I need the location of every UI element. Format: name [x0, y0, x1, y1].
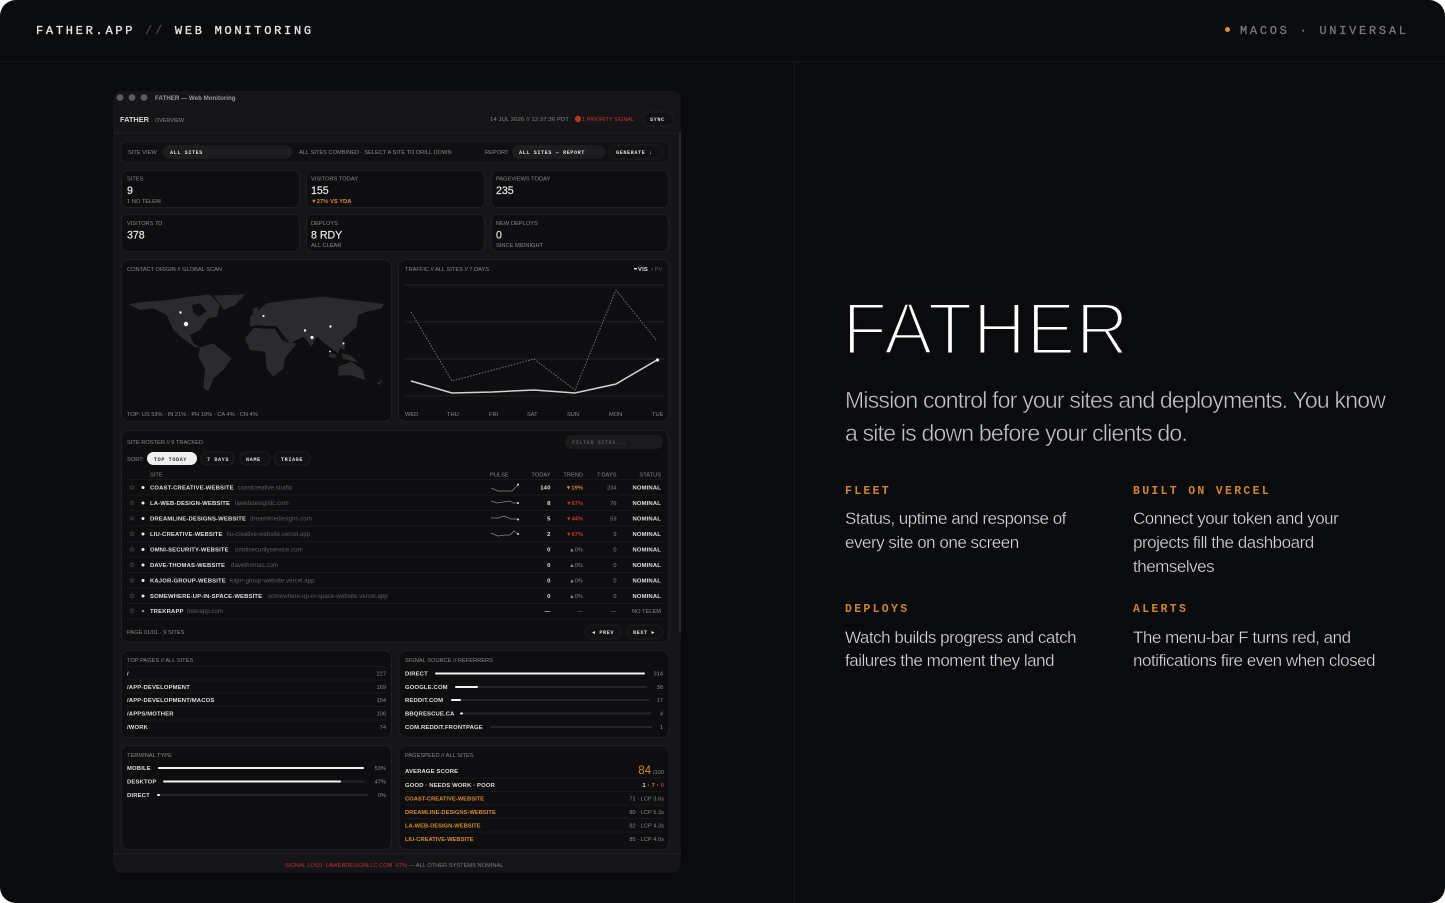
deploys text: Watch builds progress and catch: [845, 628, 1076, 646]
row: coast creative: [129, 484, 661, 492]
row: kajor group: [129, 576, 661, 584]
row: kajor group: 0: [547, 578, 551, 584]
row: la web design: ☆: [129, 499, 135, 507]
table row lines: [127, 480, 664, 619]
table header: TODAY: [531, 472, 551, 478]
stat card: pageviews today: PAGEVIEWS TODAY: [496, 176, 550, 182]
deploys text: [845, 628, 1076, 670]
fleet heading: FLEET: [845, 484, 891, 498]
row: somewhere up in space: ▲0%: [569, 594, 583, 600]
stat card: deploys: [306, 214, 484, 252]
panel: pagespeed: 84: [638, 765, 652, 777]
pagination: ◄ PREV: [592, 630, 614, 636]
header bar: [0, 0, 1445, 62]
row: trekrapp: ☆: [129, 607, 135, 615]
panel: contact origin world map: TOP: US 53% · IN 21% · PH 10% · CA 4% · CN 4%: [127, 412, 258, 418]
top toolbar: FATHER: [120, 115, 150, 124]
row: omni security: 0: [613, 548, 616, 554]
stat card: new deploys: [492, 214, 668, 252]
panel: terminal type bars: [122, 746, 392, 850]
stat card: pageviews today: 235: [496, 185, 514, 197]
site view selector bar: SITE VIEW: [128, 150, 157, 156]
panel: traffic line chart: ▪ PV: [651, 267, 662, 273]
row: kajor group: kajor-group-website.vercel.app: [230, 578, 315, 584]
day labels: SAT: [527, 412, 538, 418]
row: omni security: [129, 546, 661, 554]
stat card: visitors 7d: 378: [127, 230, 145, 242]
panel: terminal type bars: 53%: [375, 766, 386, 772]
top toolbar: SYNC: [650, 117, 665, 123]
row: liu creative: 2: [547, 532, 551, 538]
row: trekrapp: [129, 607, 661, 615]
site view selector bar: [121, 141, 669, 163]
stat card: visitors 7d: [122, 214, 300, 252]
row: omni security: ☆: [129, 546, 135, 554]
row: la web design: lawebdesignllc.com: [235, 500, 289, 507]
table header: STATUS: [639, 472, 661, 478]
stat card: visitors today: [306, 170, 484, 208]
panel: terminal type bars: TERMINAL TYPE: [127, 753, 172, 759]
sort controls: NAME: [246, 457, 261, 463]
panel: pagespeed: LIU-CREATIVE-WEBSITE: [405, 837, 474, 843]
panel: top pages: 106: [376, 712, 386, 718]
description: Mission control for your sites and deployments. You know: [845, 387, 1385, 413]
footer signal ticker: SIGNAL LOSS: LAWEBDESIGNLLC.COM -67% — ALL OTHER SYSTEMS NOMINAL: [285, 863, 503, 869]
panel: top pages: /APPS/MOTHER: [127, 712, 174, 718]
panel: contact origin world map: CONTACT ORIGIN // GLOBAL SCAN: [127, 267, 222, 273]
table header: TREND: [563, 472, 583, 478]
row: omni security: ▲0%: [569, 548, 583, 554]
row: omni security: OMNI-SECURITY-WEBSITE: [150, 548, 229, 554]
row: coast creative: 140: [540, 486, 551, 492]
row: trekrapp: NO TELEM: [632, 609, 661, 615]
row: la web design: NOMINAL: [632, 501, 661, 507]
row: liu creative: liu-creative-website.vercel.app: [227, 531, 311, 538]
feature: alerts: [1133, 603, 1375, 670]
alerts heading: ALERTS: [1133, 603, 1188, 616]
row: dreamline designs: 59: [610, 516, 616, 522]
panel: top pages: /WORK: [127, 725, 149, 731]
panel: signal source referrers: SIGNAL SOURCE // REFERRERS: [405, 658, 493, 664]
filter input: [565, 435, 663, 449]
row: la web design: ▼67%: [566, 501, 583, 507]
panel: terminal type bars: DIRECT: [127, 793, 150, 799]
panel: top pages: TOP PAGES // ALL SITES: [127, 658, 193, 664]
stat card: new deploys: SINCE MIDNIGHT: [496, 243, 544, 249]
feature: fleet: [845, 484, 1066, 552]
app screenshot: web monitoring dashboard: [113, 91, 681, 873]
row: liu creative: [129, 530, 661, 538]
row: coast creative: NOMINAL: [632, 486, 661, 492]
panel: pagespeed: 85 · LCP 4.0s: [629, 837, 664, 843]
pageviews dashed line: [411, 290, 657, 390]
panel: pagespeed: [399, 746, 669, 850]
vercel text: themselves: [1133, 557, 1214, 576]
row: la web design: [129, 499, 661, 507]
window frame: [113, 91, 681, 873]
row: somewhere up in space: 0: [547, 594, 551, 600]
title bar: [117, 94, 236, 102]
vertical divider: [794, 62, 795, 903]
row: kajor group: KAJOR-GROUP-WEBSITE: [150, 578, 226, 584]
day labels: [405, 412, 664, 418]
fleet text: [845, 509, 1066, 552]
pagination: [127, 625, 663, 639]
row: trekrapp: TREKRAPP: [150, 609, 184, 615]
panel: pagespeed: PAGESPEED // ALL SITES: [405, 753, 474, 759]
day labels: TUE: [652, 412, 664, 418]
pagination: PAGE 01/01 · 9 SITES: [127, 630, 185, 636]
fleet text: Status, uptime and response of: [845, 509, 1066, 528]
row: somewhere up in space: SOMEWHERE-UP-IN-SPACE-WEBSITE: [150, 594, 262, 600]
stat card: visitors 7d: VISITORS 7D: [127, 221, 162, 227]
table header: [150, 472, 661, 478]
fleet text: every site on one screen: [845, 533, 1019, 552]
site view selector bar: REPORT: [485, 150, 509, 156]
panel: pagespeed: 1 · 7 · 0: [642, 783, 665, 789]
top toolbar: 14 JUL 2026 // 12:37:36 PDT: [490, 117, 569, 123]
panel: pagespeed: AVERAGE SCORE: [405, 769, 458, 775]
panel: signal source referrers: COM.REDDIT.FRONTPAGE: [405, 725, 483, 731]
row: liu creative: NOMINAL: [632, 532, 661, 538]
stat card: deploys: DEPLOYS: [311, 221, 338, 227]
panel: pagespeed: /100: [653, 770, 664, 776]
sort controls: [127, 452, 310, 465]
panel: traffic line chart: TRAFFIC // ALL SITES // 7 DAYS: [405, 267, 489, 273]
stat card: pageviews today: [492, 170, 668, 208]
panel: top pages: /: [127, 672, 129, 678]
row: dave thomas: [129, 561, 661, 569]
table header: PULSE: [490, 472, 509, 478]
panel: terminal type bars: MOBILE: [127, 766, 151, 772]
stat card: visitors today: 155: [311, 185, 329, 197]
panel: top pages: 74: [380, 725, 386, 731]
row: dave thomas: ☆: [129, 561, 135, 569]
vercel heading: BUILT ON VERCEL: [1133, 484, 1271, 498]
row: la web design: LA-WEB-DESIGN-WEBSITE: [150, 501, 230, 507]
row: liu creative: ☆: [129, 530, 135, 538]
panel: site roster table: SITE ROSTER // 9 TRACKED: [127, 440, 203, 446]
row: dave thomas: DAVE-THOMAS-WEBSITE: [150, 563, 225, 569]
day labels: SUN: [567, 412, 579, 418]
panel: site roster table: [122, 430, 668, 642]
sort controls: TRIAGE: [281, 457, 303, 463]
row: liu creative: LIU-CREATIVE-WEBSITE: [150, 532, 223, 538]
row: somewhere up in space: ☆: [129, 592, 135, 600]
row: dave thomas: 0: [547, 563, 551, 569]
panel: top pages: /APP-DEVELOPMENT: [127, 685, 190, 691]
row: dreamline designs: DREAMLINE-DESIGNS-WEBSITE: [150, 516, 246, 522]
row: la web design: 76: [610, 501, 616, 507]
row: omni security: omnisecurityservice.com: [235, 546, 303, 554]
sort controls: 7 DAYS: [207, 457, 229, 463]
row: trekrapp: —: [611, 609, 617, 615]
description: [845, 387, 1386, 446]
row: la web design: 8: [547, 501, 551, 507]
day labels: FRI: [489, 412, 499, 418]
row: dreamline designs: NOMINAL: [632, 516, 661, 522]
stat card: sites: 1 NO TELEM: [127, 199, 161, 205]
alerts text: notifications fire even when closed: [1133, 651, 1375, 670]
panel: terminal type bars: 47%: [375, 780, 386, 786]
row: liu creative: 9: [613, 532, 616, 538]
stat card: sites: SITES: [127, 176, 144, 182]
day labels: WED: [405, 412, 418, 418]
deploys heading: DEPLOYS: [845, 603, 909, 616]
row: kajor group: NOMINAL: [632, 578, 661, 584]
row: somewhere up in space: NOMINAL: [632, 594, 661, 600]
site view selector bar: ALL SITES: [170, 150, 203, 156]
vercel text: Connect your token and your: [1133, 509, 1338, 528]
deploys text: failures the moment they land: [845, 651, 1054, 670]
alerts text: [1133, 628, 1375, 670]
day labels: THU: [447, 412, 459, 418]
row: coast creative: coastcreative.studio: [238, 484, 293, 492]
stat card: sites: 9: [127, 185, 133, 197]
stat card: new deploys: NEW DEPLOYS: [496, 221, 538, 227]
panel: top pages: /APP-DEVELOPMENT/MACOS: [127, 698, 214, 704]
top toolbar: [113, 112, 681, 633]
panel: signal source referrers: DIRECT: [405, 672, 428, 678]
row: somewhere up in space: somewhere-up-in-space-website.vercel.app: [268, 593, 388, 600]
site view selector bar: GENERATE ↓: [616, 150, 653, 156]
pagination: NEXT ►: [633, 630, 655, 636]
row: dave thomas: davethomas.com: [231, 562, 278, 569]
panel: pagespeed: 80 · LCP 5.3s: [629, 810, 664, 816]
row: dreamline designs: dreamlinedesigns.com: [250, 516, 312, 522]
sort controls: TOP TODAY: [154, 457, 187, 463]
table header: SITE: [150, 472, 163, 478]
row: dreamline designs: [129, 514, 661, 522]
panel: traffic line chart: VIS: [638, 267, 648, 273]
row: kajor group: ☆: [129, 576, 135, 584]
stat card: visitors today: VISITORS TODAY: [311, 176, 358, 182]
panel: signal source referrers: 17: [657, 698, 663, 704]
panel: top pages: 154: [376, 698, 386, 704]
panel: traffic line chart: [398, 260, 668, 422]
row: kajor group: 0: [613, 578, 616, 584]
panel: signal source referrers: BBQRESCUE.CA: [405, 712, 455, 718]
table header: 7 DAYS: [597, 472, 617, 478]
stat card: sites: [122, 170, 300, 208]
row: trekrapp: trekrapp.com: [187, 608, 223, 615]
row: omni security: NOMINAL: [632, 548, 661, 554]
row: dreamline designs: ☆: [129, 514, 135, 522]
visitors solid line: [411, 360, 657, 393]
panel: pagespeed: LA-WEB-DESIGN-WEBSITE: [405, 824, 481, 830]
panel: terminal type bars: DESKTOP: [127, 780, 156, 786]
row: kajor group: ▲0%: [569, 578, 583, 584]
row: somewhere up in space: 0: [613, 594, 616, 600]
panel: signal source referrers: 1: [660, 725, 663, 731]
row: trekrapp: —: [544, 609, 550, 615]
row: dreamline designs: ▼44%: [566, 516, 583, 522]
panel: pagespeed: 82 · LCP 4.3s: [629, 824, 664, 830]
panel: signal source referrers: [399, 650, 669, 738]
row: liu creative: ▼67%: [566, 532, 583, 538]
vercel text: [1133, 509, 1338, 576]
feature: built on vercel: [1133, 484, 1338, 576]
panel: pagespeed: 71 · LCP 3.6s: [629, 796, 664, 802]
panel: signal source referrers: 38: [657, 685, 663, 691]
row: dave thomas: NOMINAL: [632, 563, 661, 569]
title bar: FATHER — Web Monitoring: [155, 95, 236, 102]
panel: pagespeed: GOOD · NEEDS WORK · POOR: [405, 783, 496, 789]
vercel text: projects fill the dashboard: [1133, 533, 1314, 552]
panel: pagespeed: COAST-CREATIVE-WEBSITE: [405, 796, 484, 802]
panel: signal source referrers: REDDIT.COM: [405, 698, 443, 704]
panel: top pages: 169: [376, 685, 386, 691]
row: coast creative: 234: [607, 486, 616, 492]
panel: signal source referrers: GOOGLE.COM: [405, 685, 448, 691]
title: FATHER: [842, 288, 1129, 370]
panel: terminal type bars: 0%: [378, 793, 386, 799]
brand label: FATHER.APP // WEB MONITORING: [36, 24, 314, 38]
panel: signal source referrers: 4: [660, 712, 663, 718]
stat card: deploys: ALL CLEAR: [311, 243, 341, 249]
panel: pagespeed: DREAMLINE-DESIGNS-WEBSITE: [405, 810, 496, 816]
top toolbar: OVERVIEW: [155, 118, 185, 124]
sort controls: SORT:: [127, 457, 144, 463]
platform label: MACOS · UNIVERSAL: [1240, 24, 1409, 38]
filter input: FILTER SITES...: [572, 440, 627, 446]
day labels: MON: [609, 412, 622, 418]
stat card: deploys: 8 RDY: [311, 230, 342, 242]
panel: signal source referrers: 314: [654, 672, 663, 678]
alerts text: The menu-bar F turns red, and: [1133, 628, 1351, 646]
row: dave thomas: 0: [613, 563, 616, 569]
stat card: new deploys: 0: [496, 230, 502, 242]
top toolbar: 1 PRIORITY SIGNAL: [582, 117, 634, 123]
site view selector bar: ALL SITES — REPORT: [519, 150, 585, 156]
row: trekrapp: —: [577, 609, 583, 615]
world map: [128, 294, 384, 392]
row: dave thomas: ▲0%: [569, 563, 583, 569]
row: omni security: 0: [547, 548, 551, 554]
description: a site is down before your clients do.: [845, 420, 1187, 446]
stat card: visitors today: ▼27% VS YDA: [311, 199, 352, 205]
row: coast creative: ▼19%: [566, 486, 583, 492]
row: coast creative: COAST-CREATIVE-WEBSITE: [150, 486, 234, 492]
site view selector bar: ALL SITES COMBINED · SELECT A SITE TO DRILL DOWN: [299, 150, 452, 156]
panel: contact origin world map: [122, 260, 392, 422]
panel: top pages: 227: [376, 672, 386, 678]
row: dreamline designs: 5: [547, 516, 551, 522]
map signal dots: [179, 311, 344, 352]
row: somewhere up in space: [129, 592, 661, 600]
feature: deploys: [845, 603, 1076, 670]
panel: top pages: [122, 650, 392, 738]
row: coast creative: ☆: [129, 484, 135, 492]
